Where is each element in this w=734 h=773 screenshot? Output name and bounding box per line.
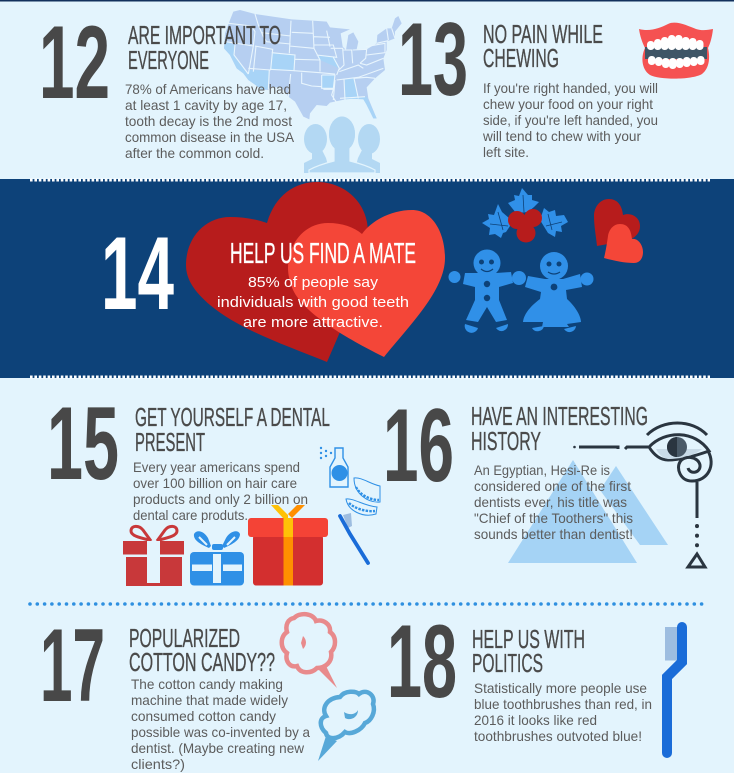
- heading: COTTON CANDY??: [129, 647, 275, 677]
- icon: USA map: [224, 10, 402, 119]
- heading: [129, 623, 275, 677]
- panel: 18 politics: [387, 604, 682, 753]
- heading: [471, 401, 648, 456]
- body text: sounds better than dentist!: [474, 526, 633, 542]
- heading: NO PAIN WHILE: [483, 19, 603, 49]
- body text: chew your food on your right: [483, 96, 653, 112]
- heading: HELP US WITH: [472, 624, 585, 654]
- number 13: 13: [398, 2, 468, 118]
- body text: [217, 274, 409, 331]
- heading: CHEWING: [483, 43, 559, 73]
- body text: [474, 680, 652, 744]
- body text: will tend to chew with your: [482, 128, 641, 144]
- body text: blue toothbrushes than red, in: [474, 696, 652, 712]
- body text: Statistically more people use: [474, 680, 647, 696]
- body text: products and only 2 billion on: [133, 491, 308, 507]
- body text: possible was co-invented by a: [131, 724, 310, 740]
- body text: An Egyptian, Hesi-Re is: [474, 462, 610, 478]
- icon: large hearts: [186, 182, 445, 362]
- panel: 12 important to everyone: [39, 5, 402, 173]
- panel: 15 dental present: [47, 386, 380, 586]
- body text: toothbrushes outvoted blue!: [474, 728, 642, 744]
- body text: considered one of the first: [474, 478, 631, 494]
- icon: pyramids: [508, 460, 668, 563]
- icon: gingerbread boy: [448, 250, 513, 333]
- heading: [135, 402, 330, 457]
- body text: [125, 81, 295, 161]
- panel: 13 no pain while chewing: [398, 2, 713, 160]
- body text: [131, 676, 310, 772]
- heading: HELP US FIND A MATE: [230, 238, 416, 270]
- heading: GET YOURSELF A DENTAL: [135, 402, 330, 432]
- body text: 2016 it looks like red: [474, 712, 597, 728]
- body text: 85% of people say: [248, 274, 379, 291]
- body text: [474, 462, 633, 542]
- body text: dental care produts.: [133, 507, 248, 523]
- number 12: 12: [39, 5, 110, 121]
- icon: red gift: [123, 526, 184, 586]
- heading: ARE IMPORTANT TO: [128, 20, 281, 50]
- panel: 16 interesting history: [383, 388, 711, 567]
- body text: left site.: [483, 144, 529, 160]
- icon: teeth: [639, 23, 713, 79]
- body text: [133, 459, 308, 523]
- icon: gingerbread girl: [512, 252, 594, 332]
- icon: blue gift: [190, 531, 244, 586]
- heading: EVERYONE: [128, 45, 209, 75]
- heading: POLITICS: [472, 648, 543, 678]
- heading: PRESENT: [135, 427, 205, 457]
- body text: dentist. (Maybe creating new: [131, 740, 305, 756]
- body text: [482, 80, 658, 160]
- icon: dentures: [346, 478, 380, 515]
- heading: [472, 624, 585, 678]
- number 15: 15: [47, 386, 119, 502]
- body text: over 100 billion on hair care: [133, 475, 297, 491]
- body text: side, if you're left handed, you: [483, 112, 658, 128]
- body text: Every year americans spend: [133, 459, 300, 475]
- icon: spray bottle: [320, 447, 348, 487]
- icon: blue toothbrush: [665, 627, 682, 753]
- body text: after the common cold.: [125, 145, 264, 161]
- body text: clients?): [131, 756, 185, 772]
- icon: blue cotton candy: [318, 692, 374, 761]
- body text: common disease in the USA: [125, 129, 295, 145]
- body text: The cotton candy making: [131, 676, 283, 692]
- icon: holly: [482, 188, 568, 242]
- heading: [128, 20, 281, 75]
- icon: eye of Horus: [573, 423, 711, 567]
- body text: consumed cotton candy: [131, 708, 276, 724]
- panel: 14 help us find a mate: [101, 182, 643, 362]
- panel: 17 cotton candy: [40, 608, 374, 772]
- body text: 78% of Americans have had: [125, 81, 291, 97]
- body text: dentists ever, his title was: [474, 494, 627, 510]
- icon: small hearts: [594, 199, 643, 263]
- number 16: 16: [383, 388, 454, 504]
- icon: big gift: [248, 505, 328, 586]
- icon: pink cotton candy: [282, 614, 337, 688]
- icon: group of people: [304, 116, 380, 173]
- body text: "Chief of the Toothers" this: [474, 510, 633, 526]
- body text: are more attractive.: [243, 314, 383, 331]
- heading: POPULARIZED: [129, 623, 240, 653]
- icon: toothbrush small: [340, 513, 368, 563]
- body text: at least 1 cavity by age 17,: [125, 97, 287, 113]
- body text: machine that made widely: [131, 692, 288, 708]
- heading: HISTORY: [471, 426, 541, 456]
- body text: If you're right handed, you will: [483, 80, 658, 96]
- body text: tooth decay is the 2nd most: [125, 113, 292, 129]
- number 14: 14: [101, 216, 174, 332]
- number 18: 18: [387, 604, 457, 720]
- heading: [483, 19, 603, 73]
- number 17: 17: [40, 608, 105, 724]
- body text: individuals with good teeth: [217, 294, 409, 311]
